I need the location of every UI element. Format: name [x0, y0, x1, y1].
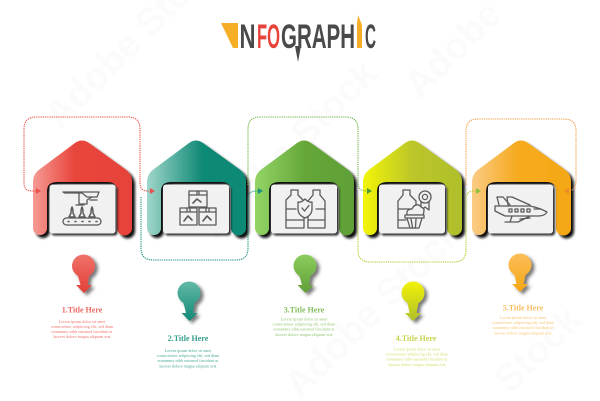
panel	[50, 184, 116, 234]
panel	[163, 184, 229, 234]
icon: bottle, cupcake and award	[398, 190, 431, 228]
watermark: Adobe Stock	[277, 212, 471, 401]
body 2: laoreet dolore magna aliquam erat	[159, 364, 217, 368]
icon: stacked boxes	[180, 191, 216, 225]
icon: conveyor factory	[63, 192, 101, 225]
icon: airplane	[495, 197, 547, 222]
house 5 orange	[472, 140, 571, 236]
body 4	[386, 346, 449, 367]
body 1: Lorem ipsum dolor sit amet	[59, 319, 106, 324]
body 5: laoreet dolore magna aliquam erat	[494, 330, 552, 336]
house 3 green	[255, 140, 354, 236]
title logo	[221, 15, 376, 62]
body 1	[51, 319, 114, 339]
body 4: nonummy nibh euismod tincidunt ut	[387, 356, 448, 362]
house 4 lime	[363, 140, 462, 236]
logo text: FO	[257, 18, 280, 56]
body 2: consectetuer adipiscing elit, sed diam	[157, 353, 220, 359]
connector 5 orange	[466, 119, 576, 194]
title 2: 2.Title Here	[168, 334, 209, 343]
body 3	[273, 316, 336, 337]
body 1: laoreet dolore magna aliquam erat	[53, 334, 111, 339]
panel	[271, 184, 337, 234]
arrowhead	[258, 188, 263, 194]
body 3: consectetuer adipiscing elit, sed diam	[273, 322, 336, 328]
icon: bottles with shield	[286, 190, 325, 228]
title 4: 4.Title Here	[396, 334, 437, 343]
logo text: N	[240, 18, 256, 56]
body 5: Lorem ipsum dolor sit amet	[500, 315, 547, 320]
body 5	[492, 315, 555, 336]
body 5: nonummy nibh euismod tincidunt ut	[493, 325, 554, 330]
pin 1 red	[51, 255, 114, 339]
connector 4 lime	[358, 188, 481, 262]
logo orange I	[357, 15, 362, 48]
body 2: Lorem ipsum dolor sit amet	[165, 348, 212, 353]
logo text	[240, 18, 376, 56]
arrowhead	[36, 188, 155, 194]
logo orange wedge	[221, 23, 238, 48]
title 5: 5.Title Here	[503, 304, 544, 312]
connector 3 green	[248, 117, 372, 194]
pin 4 lime	[386, 282, 449, 367]
body 4: consectetuer adipiscing elit, sed diam	[386, 352, 449, 358]
body 1: consectetuer adipiscing elit, sed diam	[51, 324, 114, 330]
connector 1 red	[24, 117, 155, 194]
pin 5 orange	[492, 254, 555, 336]
arrowhead	[476, 188, 481, 194]
panel	[379, 184, 445, 234]
body 4: Lorem ipsum dolor sit amet	[394, 346, 441, 352]
arrowhead	[367, 188, 372, 194]
connector 2 teal	[141, 188, 263, 260]
body 2	[157, 348, 220, 368]
house 1 red	[33, 140, 132, 236]
body 3: Lorem ipsum dolor sit amet	[281, 316, 328, 322]
logo text: GRAPH	[281, 18, 355, 56]
body 2: nonummy nibh euismod tincidunt ut	[158, 358, 219, 363]
panel	[488, 184, 553, 234]
body 4: laoreet dolore magna aliquam erat	[388, 362, 446, 367]
watermark: Stock	[487, 298, 590, 401]
body 3: nonummy nibh euismod tincidunt ut	[274, 326, 335, 332]
arrowhead	[564, 188, 569, 194]
pin 3 green	[273, 255, 336, 337]
body 1: nonummy nibh euismod tincidunt ut	[52, 329, 113, 334]
text: C	[365, 18, 376, 56]
body 3: laoreet dolore magna aliquam erat	[275, 332, 333, 337]
logo spike on R	[295, 46, 301, 62]
title 3: 3.Title Here	[284, 306, 325, 314]
title 1: 1.Title Here	[62, 306, 103, 314]
watermark: Adobe Stock	[192, 52, 386, 246]
body 5: consectetuer adipiscing elit, sed diam	[492, 320, 555, 326]
pin 2 teal	[157, 281, 220, 368]
house 2 teal	[147, 140, 246, 236]
